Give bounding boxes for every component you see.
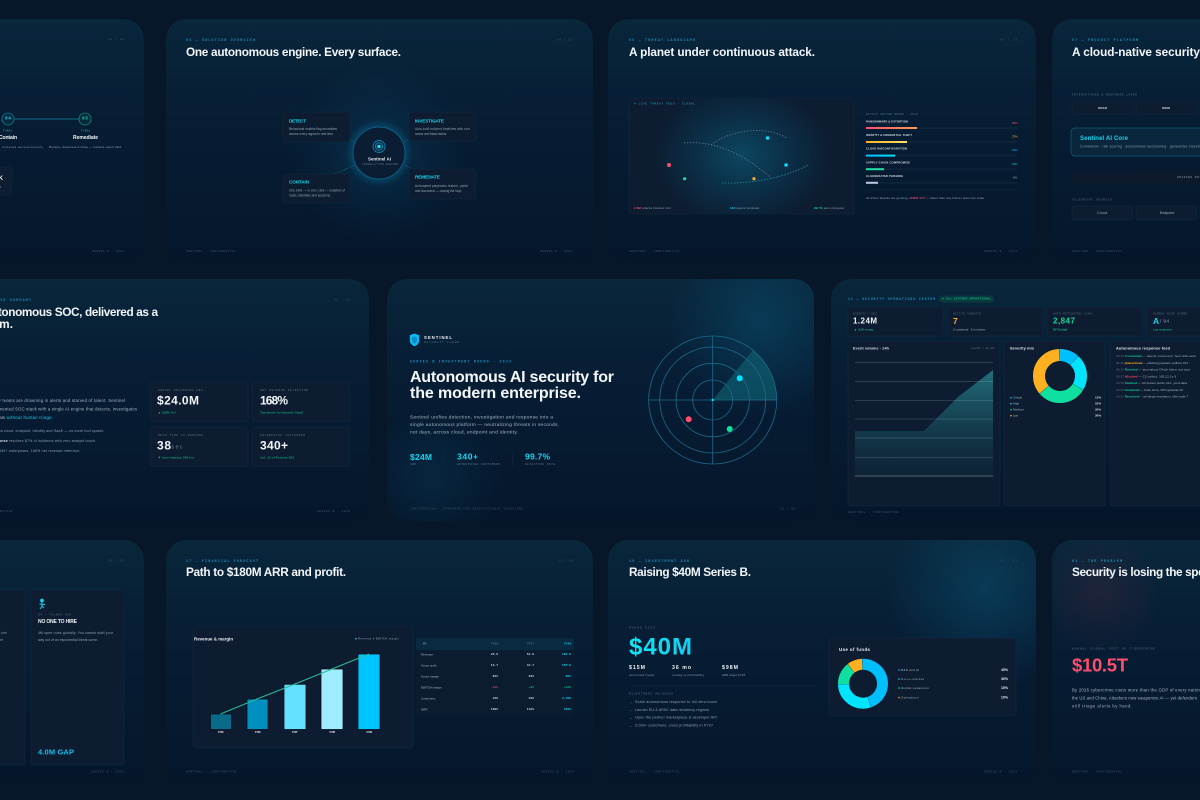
table: forecast: EBITDA margin <box>421 686 442 690</box>
cover stats: $24M <box>410 452 432 462</box>
table: forecast: FY29 <box>564 642 571 646</box>
table: forecast: -48% <box>491 686 498 689</box>
kpi: customers: 340+ <box>260 438 288 452</box>
response layer: SIEM <box>1162 106 1170 110</box>
kpi: customers: ENTERPRISE CUSTOMERS <box>260 434 305 437</box>
card: detect: DETECT <box>289 118 306 124</box>
funds legend: 30% <box>1001 677 1008 681</box>
card: remediate: Automated playbooks restore, patch <box>415 184 468 188</box>
card: contain: hosts, identities and sessions. <box>289 194 331 198</box>
footer: SERIES B · 2024 <box>92 250 124 253</box>
map stats: 2.8M attacks blocked /min <box>634 206 671 210</box>
round stats: $98M <box>722 665 738 671</box>
cover stats: ARR <box>410 463 416 466</box>
card: remediate: REMEDIATE <box>415 174 440 180</box>
red glow <box>1038 530 1162 654</box>
kpi: arr: $24.0M <box>157 394 199 408</box>
funds legend: Go-to-market <box>901 677 924 681</box>
slide: threat landscape <box>608 19 1036 261</box>
timeline connector <box>14 118 79 120</box>
milestones: → <box>629 724 633 728</box>
bars <box>210 654 380 730</box>
round stats: 36 mo <box>672 665 691 671</box>
card: detect <box>283 112 350 142</box>
kpi: mttr: sec <box>172 444 183 450</box>
slide: solution overview: 04 / 20 <box>557 38 572 42</box>
telemetry sources: Endpoint <box>1160 211 1174 215</box>
slide: solution overview: SERIES B · 2024 <box>540 250 572 253</box>
milestones: 2,000+ customers, cross profitability in FY27 <box>635 724 713 728</box>
logo: SENTINEL <box>424 335 452 340</box>
panel: partial card <box>0 590 25 765</box>
funds legend: Operations <box>901 696 920 700</box>
card: detect: Behavioral models flag anomalies <box>289 127 337 131</box>
table: forecast: 155% <box>564 708 571 711</box>
slide: investment ask: 19 / 20 <box>1000 558 1017 562</box>
panel: response feed <box>1110 341 1200 506</box>
slide: financial forecast: 13 / 20 <box>558 558 573 562</box>
cover stats: 340+ <box>457 452 478 462</box>
table: forecast: 142% <box>527 708 534 711</box>
milestones: Scale autonomous response to full zero-touch <box>635 700 717 704</box>
problem text <box>1072 688 1200 708</box>
table: forecast: 86% <box>566 675 571 678</box>
stat: $10.5T <box>1072 654 1129 676</box>
table: forecast: 82% <box>493 675 498 678</box>
table: forecast: Customers <box>421 696 436 700</box>
round stats: ARR target FY28 <box>722 673 745 677</box>
cover stats <box>410 452 555 466</box>
ai core: Sentinel AI Core <box>1080 136 1129 142</box>
panel: revenue chart <box>193 626 413 748</box>
severity legend: High <box>1013 402 1019 406</box>
summary text <box>0 398 137 453</box>
cover stats: ENTERPRISE CUSTOMERS <box>457 463 500 466</box>
table: forecast: NRR <box>421 708 428 712</box>
central engine <box>353 127 405 179</box>
severity legend: Low <box>1013 414 1019 418</box>
severity legend: 30% <box>1095 408 1101 412</box>
milestones: → <box>629 716 633 720</box>
footer: SENTINEL · CONFIDENTIAL <box>848 511 899 514</box>
card: remediate <box>409 169 476 199</box>
kpi: mttr <box>150 427 248 466</box>
footer: SENTINEL · CONFIDENTIAL <box>629 250 680 253</box>
slide: financial forecast <box>166 540 593 782</box>
slide: cover <box>362 227 857 548</box>
threat map panel <box>628 98 854 214</box>
attack vector bars: CLOUD MISCONFIGURATION <box>866 147 907 151</box>
slide: response timeline <box>0 19 144 261</box>
kpi: arr: ▲ 210% YoY <box>158 411 176 415</box>
radar <box>649 336 777 464</box>
funds legend: Global expansion <box>901 686 929 690</box>
footer: SENTINEL · CONFIDENTIAL <box>1072 770 1122 774</box>
kpi: customers <box>252 427 350 466</box>
kpi: auto mitigated: 2,847 <box>1053 316 1076 326</box>
severity donut <box>1039 355 1081 397</box>
table: forecast: 168% <box>491 708 498 711</box>
kpi: mttr: ▼ from industry 280 hrs <box>158 456 194 460</box>
round size: $40M <box>629 634 692 660</box>
slide: investment ask: 19 — INVESTMENT ASK <box>629 559 689 563</box>
map stats: 99.7% auto-mitigated <box>814 206 844 210</box>
kpi: arr: ANNUAL RECURRING REV. <box>158 389 205 392</box>
slide: financial forecast: SERIES B · 2024 <box>541 770 574 774</box>
severity legend: Critical <box>1013 396 1022 400</box>
kpi: nrr: NET REVENUE RETENTION <box>260 389 308 392</box>
attack vector bars: 8% <box>1013 175 1017 179</box>
map stats: 142 regions monitored <box>730 206 759 210</box>
attack vector bars: ATTACK VECTOR SHARE · 2024 <box>866 113 918 116</box>
attack vector bars: SUPPLY-CHAIN COMPROMISE <box>866 160 910 164</box>
headline: Autonomous AI security for <box>410 369 614 386</box>
panel: response feed: 09:42 Contained — lateral movement, host lafin-auth <box>1116 354 1196 358</box>
table: forecast: 84% <box>529 675 534 678</box>
attack vector bars: 27% <box>1012 135 1018 139</box>
kpi: threats: 7 <box>953 316 958 326</box>
response layer <box>1072 94 1200 114</box>
status pill <box>939 296 994 302</box>
axis labels <box>218 730 372 734</box>
callout card <box>0 167 12 195</box>
kpi: risk score: A <box>1153 316 1159 326</box>
kpi: nrr: Top-decile for security SaaS <box>260 411 303 415</box>
panel: talent gap: 04 · TALENT GAP <box>38 614 71 616</box>
logo: SECURITY CLOUD <box>424 341 459 344</box>
milestones: MILESTONES UNLOCKED <box>629 692 673 696</box>
step 05 remediate: Remediate <box>73 135 98 141</box>
slide: response timeline: 13 / 20 <box>108 37 124 41</box>
kpi: events: ▲ +12% vs avg <box>854 328 873 332</box>
attack vector bars: 34% <box>1012 121 1018 125</box>
table: forecast: 155.0 <box>562 664 571 667</box>
section label: 04 — SOLUTION OVERVIEW <box>186 38 255 42</box>
axis labels: FY26 <box>255 730 261 734</box>
severity legend: Medium <box>1013 408 1024 412</box>
table: forecast: 2,100 <box>562 697 571 700</box>
table: forecast: +32% <box>564 686 571 689</box>
slide: financial forecast: 17 — FINANCIAL FORECAST <box>186 559 258 563</box>
table: forecast: 340 <box>493 697 498 700</box>
table: forecast: Revenue <box>421 652 433 656</box>
severity legend: 36% <box>1095 414 1101 418</box>
axis labels: FY28 <box>330 730 336 734</box>
lede: Sentinel unifies detection, investigation and response into a <box>410 414 553 420</box>
table: forecast: Gross margin <box>421 674 439 678</box>
table: forecast: $M <box>423 642 427 646</box>
panel: response feed: 09:33 Contained — brute force, VPN gateway 02 <box>1116 388 1183 392</box>
card: investigate: Auto-built incident timelines with root <box>415 127 470 131</box>
card: contain: One click — or zero click — isolation of <box>289 188 345 192</box>
cover stats: DETECTION RATE <box>525 463 555 466</box>
central engine: Sentinel AI <box>368 156 391 162</box>
panel: revenue chart: Revenue & margin <box>194 636 233 642</box>
kpi: auto mitigated <box>1047 307 1142 336</box>
slide: threat landscape: SERIES B · 2024 <box>984 250 1017 253</box>
attack vector bars <box>866 113 1018 200</box>
cover glows <box>362 227 857 548</box>
milestones: → <box>629 708 633 712</box>
milestones <box>629 692 717 728</box>
funds donut <box>844 664 882 703</box>
milestones: Launch EU & APAC data residency regions <box>635 708 709 712</box>
footer: SENTINEL · CONFIDENTIAL <box>186 250 236 253</box>
severity legend <box>1010 396 1101 418</box>
footer: SENTINEL · CONFIDENTIAL <box>629 770 680 774</box>
attack vector bars: AI-driven attacks are growing +340% YoY — faster than any human team can scale. <box>866 196 985 200</box>
kpi: threats <box>948 307 1043 336</box>
slide: solution overview <box>166 19 593 261</box>
card: detect: across every signal in real time. <box>289 132 334 136</box>
slide: security operations center <box>831 279 1200 521</box>
footer: SENTINEL · CONFIDENTIAL <box>1072 250 1122 253</box>
kpi: arr <box>150 382 248 422</box>
milestones: → <box>629 700 633 704</box>
panel: use of funds <box>829 638 1016 716</box>
title: Path to $180M ARR and profit. <box>186 565 346 579</box>
slide: the problem <box>1038 530 1200 782</box>
cover stats: 99.7% <box>525 452 550 462</box>
table: forecast: 180.0 <box>562 653 571 656</box>
hub glow <box>326 100 433 208</box>
slide: investment ask <box>608 490 1085 782</box>
central engine: CORRELATION ENGINE <box>362 163 398 166</box>
panel: talent gap: NO ONE TO HIRE <box>38 619 78 625</box>
title: A planet under continuous attack. <box>629 45 815 59</box>
axis labels: FY29 <box>366 730 372 734</box>
kpi: risk score: / 94 <box>1160 318 1169 324</box>
card: investigate <box>409 112 476 141</box>
funds legend: R&D and AI <box>901 668 919 672</box>
kpi: auto mitigated: AUTO-MITIGATED (24H) <box>1053 312 1093 316</box>
panel: event volume chart: Event volume · 24h <box>853 347 890 351</box>
kpi: customers: Incl. 22 of Fortune 500 <box>260 456 294 460</box>
kpi: events: 1.24M <box>853 316 877 326</box>
panel: response feed: Autonomous response feed <box>1116 347 1171 351</box>
axis labels: FY27 <box>292 730 298 734</box>
round stats <box>629 665 815 686</box>
step 05 remediate <box>49 113 121 149</box>
attack vector bars: IDENTITY & CREDENTIAL THEFT <box>866 133 912 137</box>
slide: security operations center: 11 — SECURITY OPERATIONS CENTER <box>848 297 935 301</box>
kpi: risk score: GLOBAL RISK SCORE <box>1153 312 1187 316</box>
slide: why now: 09 / 20 <box>108 558 124 562</box>
logo <box>410 334 459 346</box>
slide: the problem: 03 — THE PROBLEM <box>1072 559 1122 563</box>
lede: not days, across cloud, endpoint and identity. <box>410 430 518 436</box>
table: forecast: 42.7 <box>527 664 534 667</box>
table: forecast: FY26 <box>491 642 498 646</box>
panel: event volume chart <box>848 341 1000 506</box>
table: forecast <box>416 638 574 716</box>
attack arcs <box>684 131 808 183</box>
telemetry sources <box>1072 198 1200 220</box>
panel: response feed: 09:35 Patched — S3 bucket public ACL, prod-data <box>1116 381 1187 385</box>
attack vector bars: 19% <box>1012 148 1018 152</box>
attack vector bars: AI-GENERATED PHISHING <box>866 174 903 178</box>
funds legend <box>898 668 1008 700</box>
kpi: risk score: Low exposure <box>1153 328 1172 332</box>
table: forecast: 52.0 <box>527 653 534 656</box>
panel: talent gap: way out of an exponential threat curve. <box>38 638 98 642</box>
round size: ROUND SIZE <box>629 626 655 630</box>
panel: talent gap: 4M open roles globally. You cannot staff your <box>38 631 114 635</box>
kpi: threats: 2 contained · 5 in review <box>953 328 986 332</box>
panel: revenue chart: ■ Revenue ■ EBITDA margin <box>355 637 399 641</box>
response layer: INTERACTIONS & RESPONSE LAYER <box>1072 94 1137 96</box>
kpi: nrr: 168% <box>260 394 288 408</box>
panel: talent gap <box>31 590 124 765</box>
margin line <box>220 654 369 714</box>
step 04 contain: T+48s <box>3 130 12 132</box>
severity legend: 22% <box>1095 402 1101 406</box>
severity legend: 12% <box>1095 396 1101 400</box>
step 04 contain <box>0 113 43 149</box>
funds legend: 45% <box>1001 668 1008 672</box>
card: contain: CONTAIN <box>289 180 310 184</box>
slide: executive summary <box>0 279 369 521</box>
panel: event volume chart: events / 10 min <box>971 346 995 350</box>
slide: threat landscape: 06 — THREAT LANDSCAPE <box>629 38 695 42</box>
table: forecast: 19.7 <box>491 664 498 667</box>
lede <box>410 414 559 436</box>
funds legend: 15% <box>1001 686 1008 690</box>
table: forecast: 26.0 <box>491 653 498 656</box>
panel: use of funds: Use of funds <box>839 647 871 652</box>
slide: product platform <box>1052 19 1200 261</box>
threat map panel: ● LIVE THREAT FEED · GLOBAL <box>634 102 695 106</box>
telemetry sources: Cloud <box>1097 211 1107 215</box>
attack vector bars: 12% <box>1012 162 1018 166</box>
table: forecast: Gross profit <box>421 664 437 668</box>
ai core <box>1071 128 1200 156</box>
card: investigate: cause and blast radius. <box>415 132 447 136</box>
footer: SERIES B · 2024 <box>91 770 124 774</box>
table: forecast: +4% <box>529 686 534 689</box>
status pill: ● ALL SYSTEMS OPERATIONAL <box>942 298 991 300</box>
panel: response feed: 09:37 Blocked — C2 callout, 185.22.1x.9 <box>1116 374 1176 378</box>
icon: person <box>40 599 45 609</box>
card: investigate: INVESTIGATE <box>415 118 444 124</box>
glow <box>885 490 1085 690</box>
slide: cover: 01 / 20 <box>780 506 795 510</box>
kpi: nrr <box>252 382 350 422</box>
panel: response feed: 09:31 Resolved — privilege escalation, k8s node-7 <box>1116 395 1188 399</box>
response layer: SOAR <box>1098 106 1108 110</box>
kpi: mttr: 38 <box>157 438 171 452</box>
eyebrow: SERIES B INVESTMENT ROUND · 2024 <box>410 360 511 364</box>
kpi: mttr: MEAN TIME TO RESPOND <box>158 434 203 437</box>
headline: the modern enterprise. <box>410 385 581 402</box>
slide: why now <box>0 540 144 782</box>
step 05 remediate: T+90s <box>81 130 90 132</box>
headline <box>410 369 614 402</box>
stat: ANNUAL GLOBAL COST OF CYBERCRIME <box>1072 648 1155 650</box>
threat dots <box>667 136 788 180</box>
panel: response feed: 09:41 Quarantined — phishing payload, mailbox #14 <box>1116 361 1188 365</box>
step 05 remediate: Restore, document & close — incident report filed <box>49 145 121 149</box>
round stats: $15M <box>629 665 645 671</box>
axis labels: FY25 <box>218 730 224 734</box>
title <box>0 307 158 328</box>
slide: executive summary: SERIES B · 2024 <box>317 510 350 513</box>
summary text: without human triage. <box>6 415 53 420</box>
slide: executive summary: 02 / 20 <box>334 298 350 302</box>
table: forecast: FY27 <box>527 642 534 646</box>
panel: response feed: 09:39 Revoked — anomalous OAuth token, svc-acct <box>1116 368 1190 372</box>
slide: product platform: 07 — PRODUCT PLATFORM <box>1072 38 1138 42</box>
attack vector bars: RANSOMWARE & EXTORTION <box>866 120 908 124</box>
funds legend: 10% <box>1001 696 1008 700</box>
milestones: Open the partner marketplace & developer API <box>635 716 717 720</box>
map stats <box>634 207 844 210</box>
footer: CONFIDENTIAL · PREPARED FOR INSTITUTIONAL INVESTORS <box>410 508 523 510</box>
footer: SENTINEL · CONFIDENTIAL <box>186 770 237 774</box>
card: contain <box>283 174 350 203</box>
round stats: committed (lead) <box>629 673 654 677</box>
slide: threat landscape: 05 / 20 <box>1000 38 1017 42</box>
kpi: risk score <box>1147 307 1200 336</box>
kpi: threats: ACTIVE THREATS <box>953 312 981 316</box>
kpi: events <box>848 307 943 336</box>
problem text: still triage alerts by hand. <box>1072 704 1132 708</box>
lede: single autonomous platform — neutralizing threats in seconds, <box>410 422 559 428</box>
step 05 remediate: 05 <box>82 116 88 122</box>
panel: talent gap: 4.0M GAP <box>38 748 74 756</box>
stat <box>1072 648 1155 676</box>
slide: investment ask: SERIES B · 2024 <box>984 770 1017 774</box>
title: One autonomous engine. Every surface. <box>186 45 401 59</box>
panel: severity mix <box>1004 341 1105 506</box>
card: remediate: and document — closing the loop. <box>415 189 462 193</box>
round stats: runway to profitability <box>672 673 705 677</box>
data lake bar <box>1177 176 1200 178</box>
table: forecast: 640 <box>529 697 534 700</box>
connectors <box>335 139 410 174</box>
step 04 contain: 04 <box>5 116 11 122</box>
kpi: events: EVENTS / SEC <box>853 312 877 316</box>
problem text: the US and China. Attackers now weaponize AI — yet defenders <box>1072 696 1197 700</box>
panel: severity mix: Severity mix <box>1010 347 1035 351</box>
telemetry sources: TELEMETRY SOURCES <box>1072 198 1112 202</box>
kpi: auto mitigated: 99.7% of total <box>1053 328 1067 332</box>
title: Raising $40M Series B. <box>629 565 751 579</box>
